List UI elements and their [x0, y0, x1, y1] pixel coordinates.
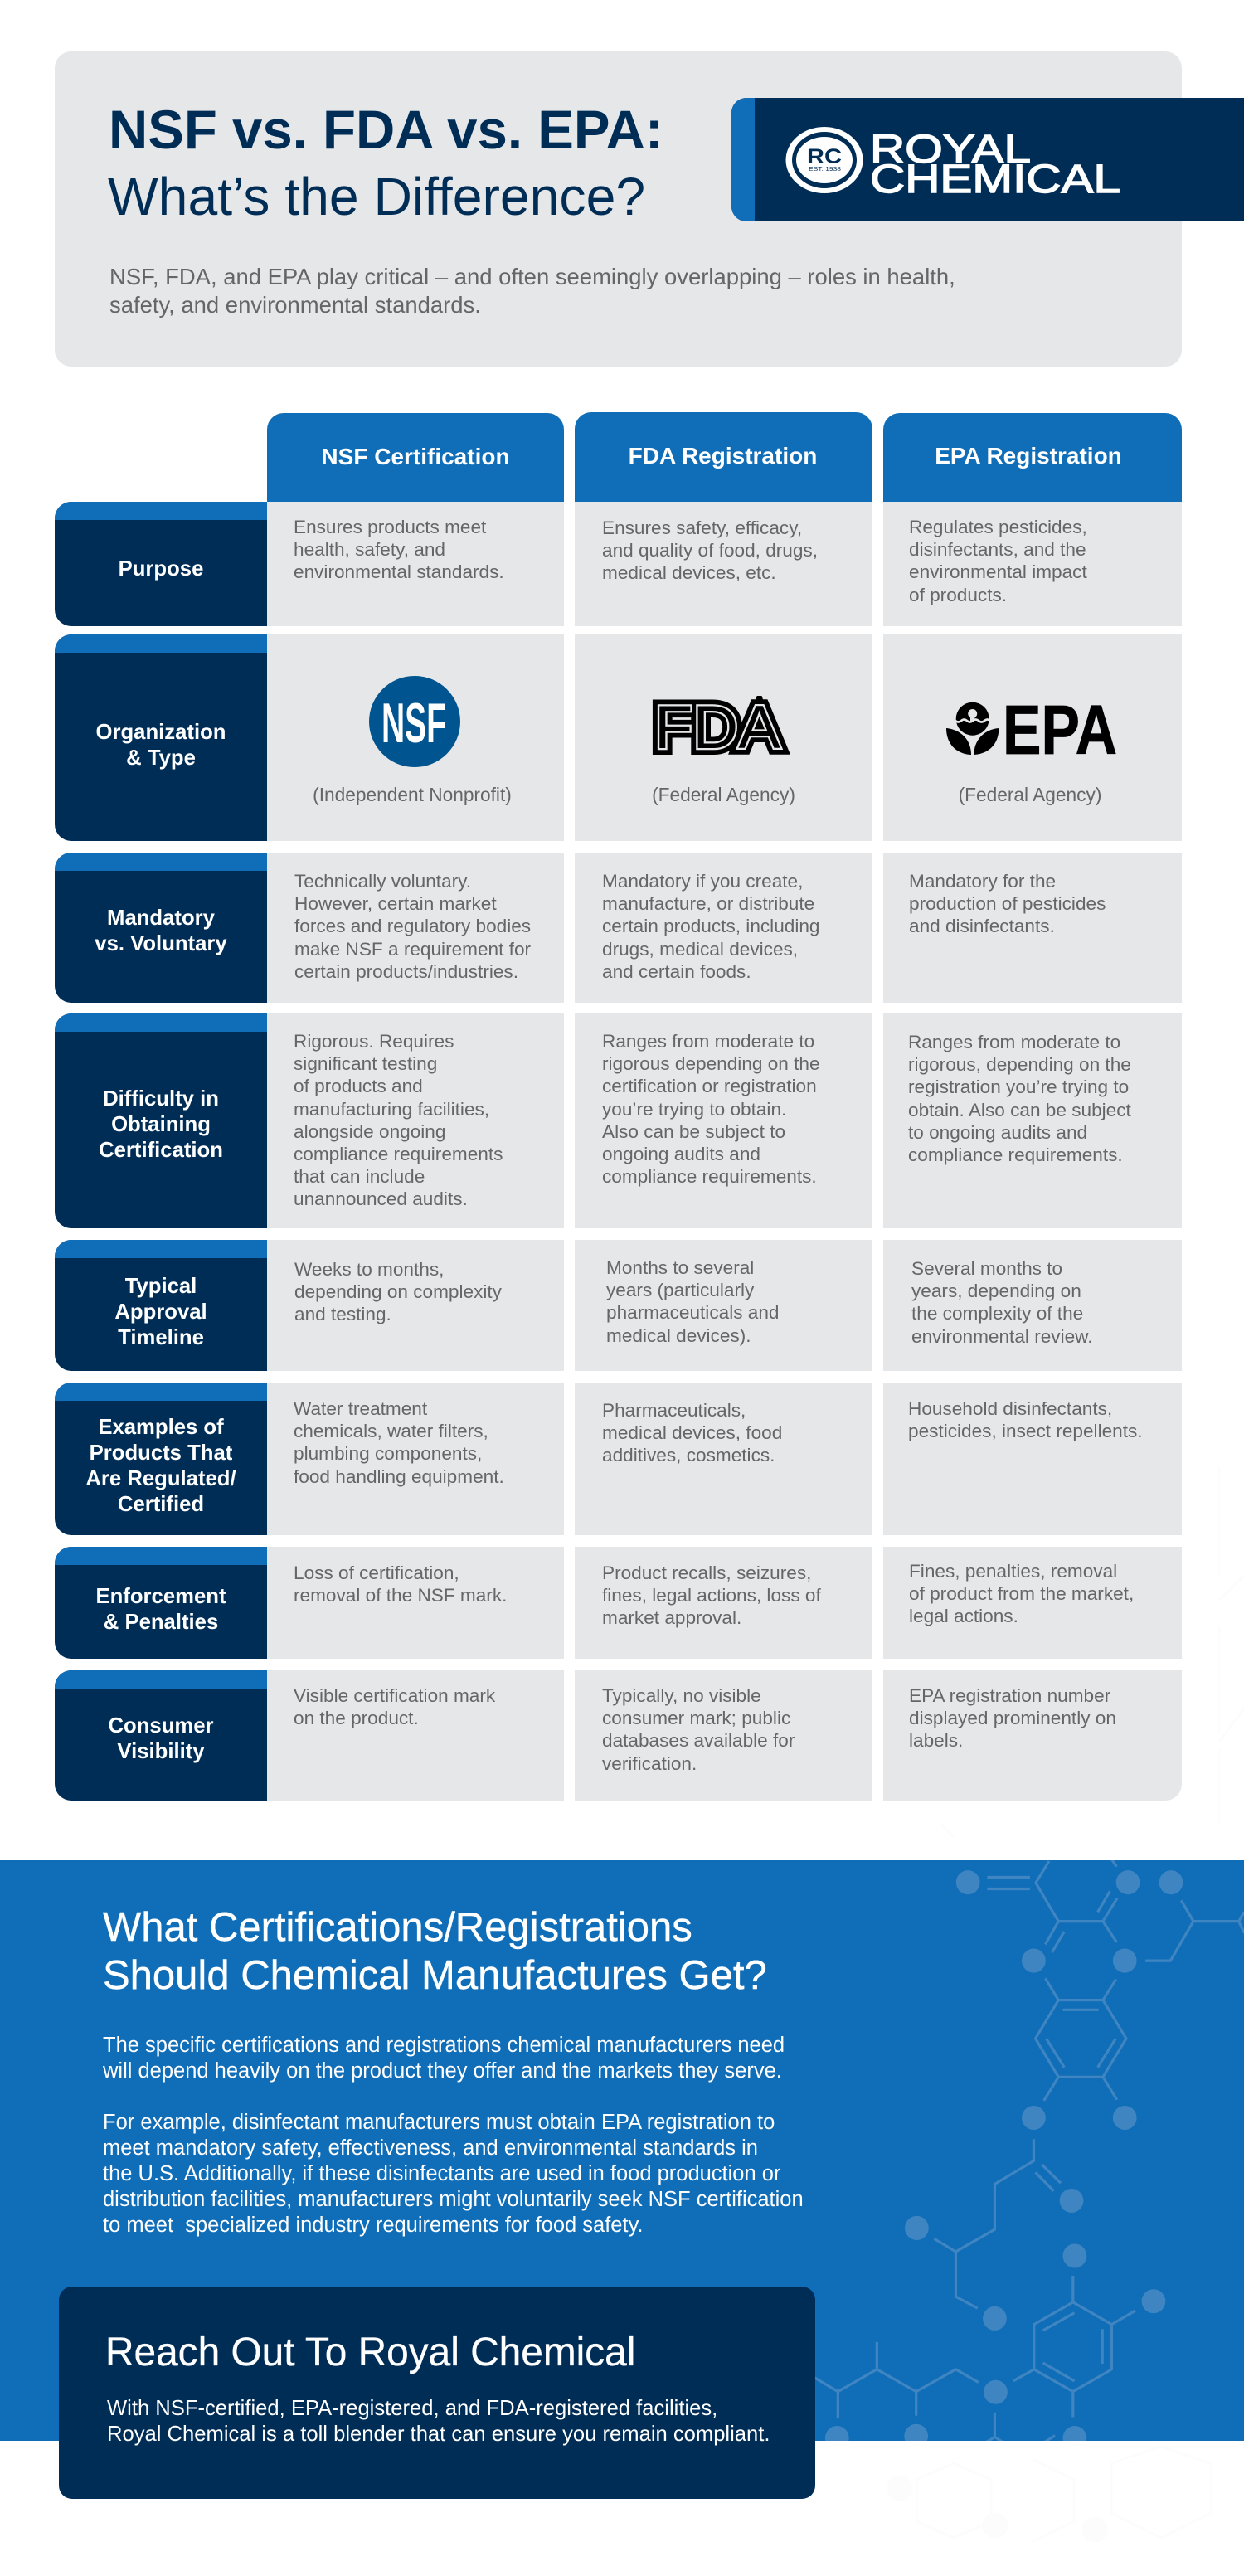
logo band: Royal Chemical: ROYAL — [870, 128, 1031, 172]
subtitle heading: What’s the Difference? — [108, 167, 645, 226]
row: Examples of Products: medical devices, food — [602, 1422, 782, 1443]
row: Consumer Visibility: Typically, no visible — [602, 1685, 761, 1706]
row: Examples of Products: additives, cosmetics. — [602, 1445, 775, 1465]
row: Purpose: medical devices, etc. — [602, 562, 776, 583]
callout text: Royal Chemical is a toll blender that can ensure you remain compliant. — [107, 2423, 770, 2446]
row: Consumer Visibility: Consumer — [108, 1714, 214, 1738]
row: Difficulty in Obtaining Certification: manufacturing facilities, — [294, 1099, 489, 1120]
row: Enforcement & Penalties: Fines, penalties, removal — [909, 1561, 1117, 1582]
row: Typical Approval Timeline: and testing. — [294, 1304, 391, 1324]
column header: EPA Registration — [883, 413, 1182, 502]
row: Consumer Visibility — [55, 1670, 1182, 1801]
section heading: What Certifications/Registrations — [103, 1905, 692, 1950]
section body text: to meet specialized industry requirements for food safety. — [103, 2214, 644, 2237]
row: Typical Approval Timeline: years, depending on — [911, 1281, 1081, 1301]
row: Mandatory vs. Voluntary: However, certain market — [294, 893, 497, 914]
row: Typical Approval Timeline — [55, 1240, 1182, 1371]
row: Difficulty in Obtaining Certification: rigorous, depending on the — [908, 1054, 1131, 1075]
column header: FDA Registration: FDA Registration — [629, 443, 817, 469]
row: Mandatory vs. Voluntary: Mandatory for the — [909, 871, 1056, 892]
row: Typical Approval Timeline: pharmaceuticals and — [606, 1302, 780, 1323]
row: Purpose: disinfectants, and the — [909, 539, 1086, 560]
row: Consumer Visibility: databases available for — [602, 1730, 795, 1751]
row: Typical Approval Timeline: Timeline — [118, 1326, 204, 1349]
row: Mandatory vs. Voluntary: manufacture, or distribute — [602, 893, 814, 914]
row: Consumer Visibility: consumer mark; public — [602, 1708, 790, 1728]
row: Mandatory vs. Voluntary: and disinfectants. — [909, 916, 1055, 936]
row: Purpose: environmental standards. — [294, 561, 504, 582]
row: Mandatory vs. Voluntary: production of pesticides — [909, 893, 1106, 914]
row: Organization & Type: Organization — [96, 721, 226, 744]
row: Mandatory vs. Voluntary: forces and regulatory bodies — [294, 916, 531, 936]
row: Difficulty in Obtaining Certification: compliance requirements. — [908, 1145, 1123, 1165]
title: NSF vs. FDA vs. EPA: — [109, 100, 663, 160]
row: Typical Approval Timeline: environmental review. — [911, 1326, 1093, 1347]
row: Organization & Type: (Independent Nonprofit) — [313, 784, 512, 805]
callout text — [107, 2397, 770, 2446]
row: Consumer Visibility: EPA registration number — [909, 1685, 1110, 1706]
row: Examples of Products: food handling equipment. — [294, 1466, 504, 1487]
row: Mandatory vs. Voluntary: and certain foods. — [602, 961, 751, 982]
row: Consumer Visibility: labels. — [909, 1730, 963, 1751]
row: Enforcement & Penalties — [55, 1547, 1182, 1659]
row: Difficulty in Obtaining Certification: certification or registration — [602, 1076, 817, 1096]
row: Difficulty in Obtaining Certification: compliance requirements — [294, 1144, 503, 1164]
row: Mandatory vs. Voluntary: certain products/industries. — [294, 961, 518, 982]
row: Consumer Visibility: on the product. — [294, 1708, 419, 1728]
row: Difficulty in Obtaining Certification: Obtaining — [111, 1113, 211, 1136]
row: Mandatory vs. Voluntary: Mandatory if you create, — [602, 871, 803, 892]
panel: header intro — [55, 51, 1182, 367]
row: Purpose: environmental impact — [909, 561, 1087, 582]
row: Examples of Products: Certified — [118, 1493, 204, 1516]
callout: Reach Out To Royal Chemical — [59, 2287, 815, 2499]
intro text: safety, and environmental standards. — [109, 292, 481, 318]
row: Difficulty in Obtaining Certification: you’re trying to obtain. — [602, 1099, 786, 1120]
row: Difficulty in Obtaining Certification: compliance requirements. — [602, 1166, 817, 1187]
row: Enforcement & Penalties: Enforcement — [95, 1585, 226, 1608]
row: Mandatory vs. Voluntary: Mandatory — [107, 906, 215, 930]
row: Consumer Visibility: displayed prominently on — [909, 1708, 1116, 1728]
section body text: the U.S. Additionally, if these disinfectants are used in food production or — [103, 2162, 780, 2185]
row: Difficulty in Obtaining Certification: Certification — [99, 1139, 223, 1162]
row: Mandatory vs. Voluntary: vs. Voluntary — [95, 932, 227, 955]
section body text: distribution facilities, manufacturers might voluntarily seek NSF certification — [103, 2188, 804, 2211]
row: Purpose: Regulates pesticides, — [909, 517, 1087, 537]
row: Enforcement & Penalties: of product from the market, — [909, 1583, 1134, 1604]
row: Enforcement & Penalties: fines, legal actions, loss of — [602, 1585, 821, 1606]
section body text: The specific certifications and registrations chemical manufacturers need — [103, 2034, 785, 2057]
row: Difficulty in Obtaining Certification: that can include — [294, 1166, 425, 1187]
row: Difficulty in Obtaining Certification: significant testing — [294, 1053, 437, 1074]
row: Mandatory vs. Voluntary: certain products, including — [602, 916, 819, 936]
row: Typical Approval Timeline: Weeks to months, — [294, 1259, 444, 1280]
row: Typical Approval Timeline: depending on complexity — [294, 1281, 502, 1302]
row: Examples of Products: Household disinfectants, — [908, 1398, 1112, 1419]
row: Difficulty in Obtaining Certification: ongoing audits and — [602, 1144, 760, 1164]
section body text: meet mandatory safety, effectiveness, and environmental standards in — [103, 2136, 758, 2160]
row: Enforcement & Penalties: Product recalls, seizures, — [602, 1563, 811, 1583]
row: Difficulty in Obtaining Certification: of products and — [294, 1076, 423, 1096]
intro text: NSF, FDA, and EPA play critical – and often seemingly overlapping – roles in health, — [109, 264, 955, 289]
row: Difficulty in Obtaining Certification: registration you’re trying to — [908, 1077, 1129, 1097]
row: Organization & Type: (Federal Agency) — [959, 784, 1101, 805]
column header: FDA Registration — [575, 412, 872, 502]
row: Examples of Products: chemicals, water filters, — [294, 1421, 488, 1441]
row: Enforcement & Penalties: Loss of certification, — [294, 1563, 459, 1583]
row: Purpose: Ensures safety, efficacy, — [602, 518, 802, 538]
row: Typical Approval Timeline: the complexity of the — [911, 1303, 1083, 1324]
section heading — [103, 1905, 767, 1998]
row: Typical Approval Timeline: Several months to — [911, 1258, 1062, 1279]
row: Examples of Products: Products That — [90, 1441, 232, 1465]
row: Enforcement & Penalties: legal actions. — [909, 1606, 1018, 1626]
row: Purpose: Ensures products meet — [294, 517, 486, 537]
row: Difficulty in Obtaining Certification: alongside ongoing — [294, 1121, 445, 1142]
logo band: Royal Chemical: RC — [807, 145, 842, 168]
section heading: Should Chemical Manufactures Get? — [103, 1953, 767, 1998]
column header: EPA Registration: EPA Registration — [935, 443, 1122, 469]
row: Enforcement & Penalties: market approval. — [602, 1607, 741, 1628]
section body text: For example, disinfectant manufacturers must obtain EPA registration to — [103, 2111, 775, 2134]
row: Difficulty in Obtaining Certification: Ranges from moderate to — [908, 1032, 1120, 1052]
panel: chemical manufacturers section background — [0, 1860, 1244, 2441]
row: Examples of Products: Pharmaceuticals, — [602, 1400, 746, 1421]
row: Examples of Products: Are Regulated/ — [85, 1467, 236, 1490]
row: Enforcement & Penalties: removal of the NSF mark. — [294, 1585, 507, 1606]
row: Organization & Type: & Type — [126, 746, 196, 770]
row: Difficulty in Obtaining Certification: rigorous depending on the — [602, 1053, 820, 1074]
row: Mandatory vs. Voluntary: make NSF a requirement for — [294, 939, 531, 960]
row: Examples of Products: Examples of — [98, 1416, 224, 1439]
row: Purpose — [55, 502, 1182, 626]
logo band: Royal Chemical: EST. 1938 — [809, 165, 841, 173]
row: Consumer Visibility: Visible certification mark — [294, 1685, 495, 1706]
section body text: will depend heavily on the product they offer and the markets they serve. — [103, 2059, 782, 2083]
row: Typical Approval Timeline: Approval — [114, 1300, 207, 1324]
row: Difficulty in Obtaining Certification: Difficulty in — [103, 1087, 219, 1111]
row: Difficulty in Obtaining Certification: Ranges from moderate to — [602, 1031, 814, 1052]
row: Enforcement & Penalties: & Penalties — [104, 1611, 218, 1634]
row: Purpose: health, safety, and — [294, 539, 445, 560]
intro text — [109, 264, 955, 318]
row: Typical Approval Timeline: Typical — [125, 1275, 197, 1298]
row: Examples of Products: pesticides, insect repellents. — [908, 1421, 1143, 1441]
row: Organization & Type — [55, 634, 1182, 841]
icon: EPA logo — [946, 701, 1117, 759]
row: Examples of Products: Water treatment — [294, 1398, 427, 1419]
row: Consumer Visibility: Visibility — [117, 1740, 205, 1763]
row: Difficulty in Obtaining Certification: Also can be subject to — [602, 1121, 785, 1142]
callout heading: Reach Out To Royal Chemical — [105, 2331, 635, 2374]
icon: NSF logo — [369, 676, 460, 767]
row: Purpose: Purpose — [119, 557, 203, 581]
row: Difficulty in Obtaining Certification: Rigorous. Requires — [294, 1031, 454, 1052]
row: Organization & Type: (Federal Agency) — [652, 784, 795, 805]
row: Purpose: and quality of food, drugs, — [602, 540, 818, 561]
column header: NSF Certification — [267, 413, 564, 502]
row: Difficulty in Obtaining Certification: obtain. Also can be subject — [908, 1100, 1131, 1120]
logo band: Royal Chemical: CHEMICAL — [870, 158, 1120, 202]
row: Typical Approval Timeline: years (particularly — [606, 1280, 754, 1300]
row: Typical Approval Timeline: Months to several — [606, 1257, 754, 1278]
row: Examples of Products: plumbing components, — [294, 1443, 482, 1464]
section body text — [103, 2034, 804, 2237]
logo band: Royal Chemical — [731, 98, 1244, 221]
callout text: With NSF-certified, EPA-registered, and FDA-registered facilities, — [107, 2397, 717, 2420]
row: Difficulty in Obtaining Certification — [55, 1013, 1182, 1228]
row: Difficulty in Obtaining Certification: to ongoing audits and — [908, 1122, 1087, 1143]
row: Mandatory vs. Voluntary: drugs, medical devices, — [602, 939, 798, 960]
row: Examples of Products — [55, 1383, 1182, 1535]
column header: NSF Certification: NSF Certification — [321, 444, 510, 469]
row: Difficulty in Obtaining Certification: unannounced audits. — [294, 1188, 468, 1209]
row: Purpose: of products. — [909, 585, 1007, 605]
row: Typical Approval Timeline: medical devices). — [606, 1325, 751, 1346]
row: Consumer Visibility: verification. — [602, 1753, 697, 1774]
row: Mandatory vs. Voluntary — [55, 853, 1182, 1003]
row: Mandatory vs. Voluntary: Technically voluntary. — [294, 871, 471, 892]
